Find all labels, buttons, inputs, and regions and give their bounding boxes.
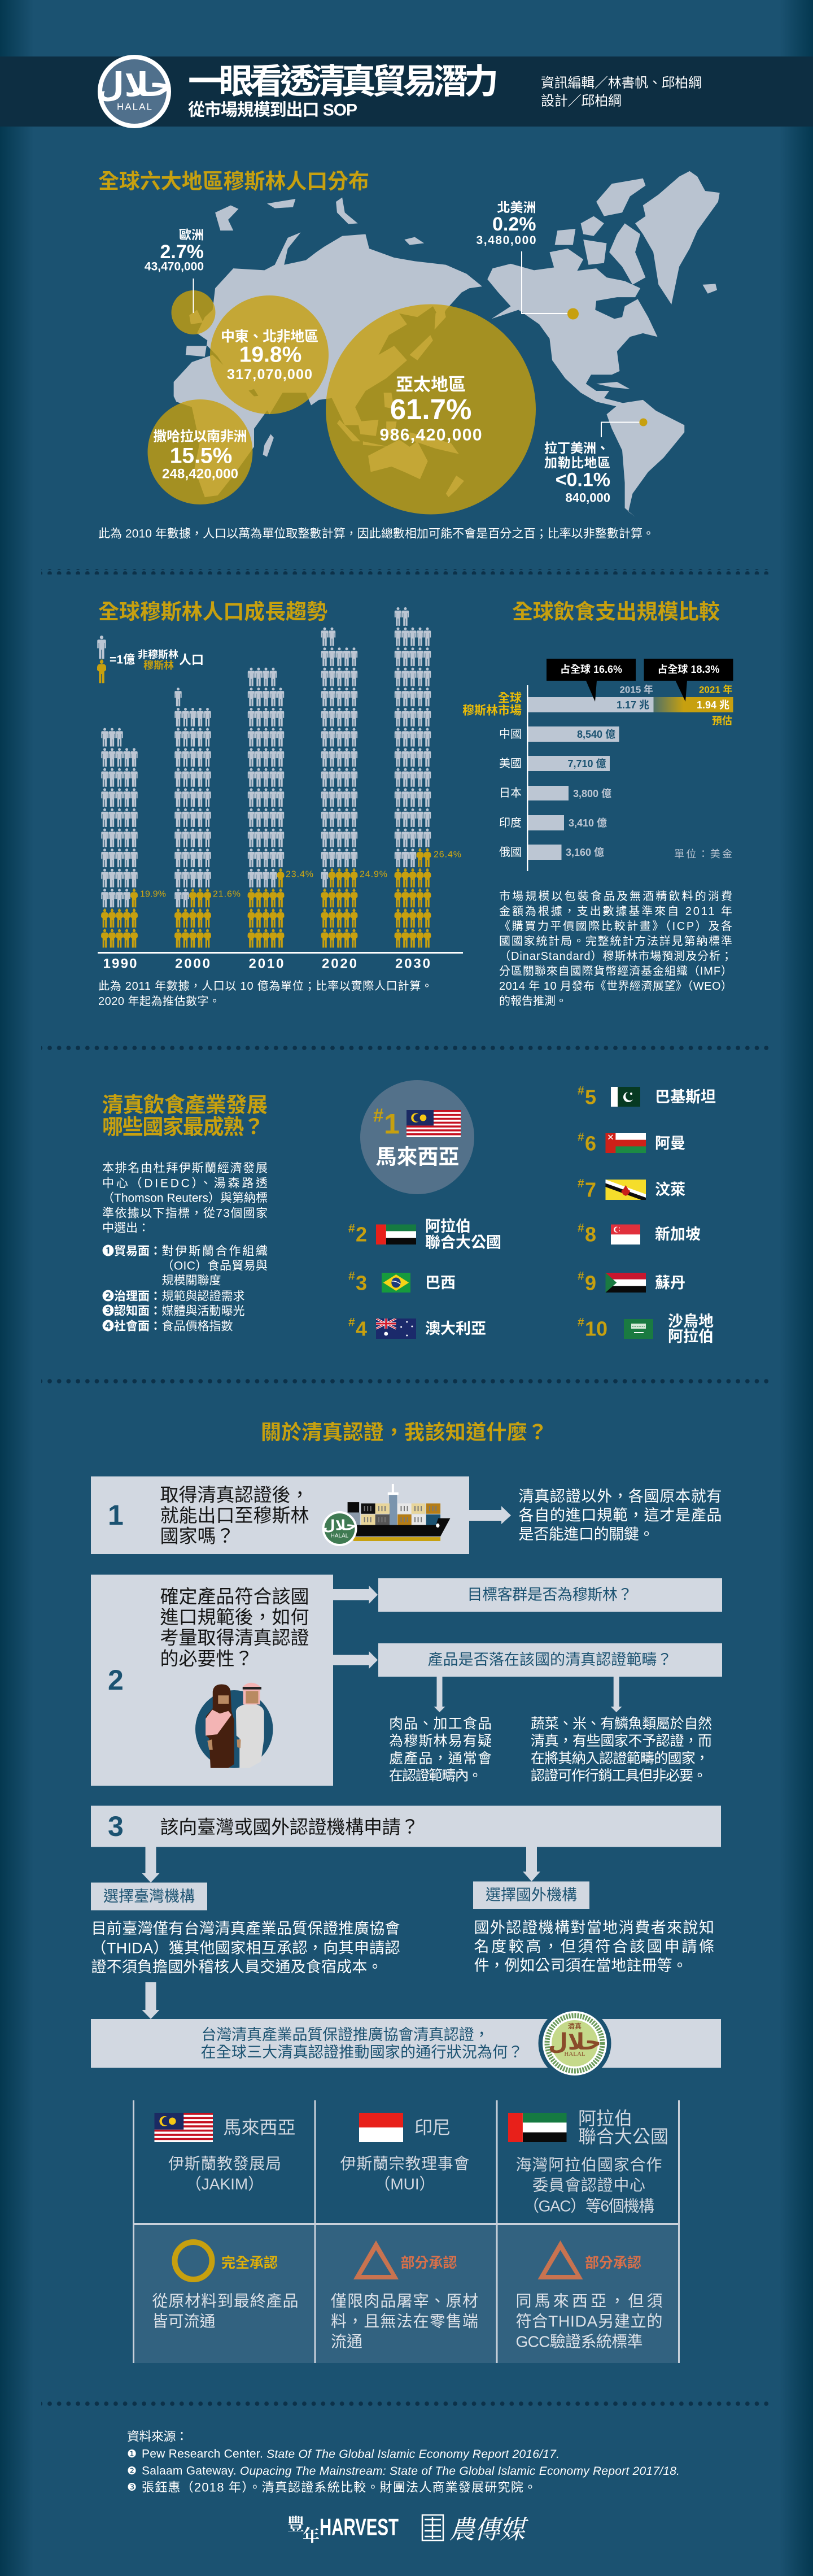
cell: UAE: （GAC）等6個機構 (523, 2198, 654, 2214)
rank 2 UAE: # (348, 1222, 355, 1235)
text: overseas option (474, 1920, 714, 1974)
cell: Malaysia: 伊斯蘭教發展局 (168, 2155, 281, 2173)
panel: world muslim population map (98, 169, 720, 540)
label: Sub-Saharan Africa: 撒哈拉以南非洲 (154, 428, 247, 444)
text: overseas option: 件，例如公司須在當地註冊等。 (474, 1957, 688, 1974)
icon: halal badge: HALAL (117, 102, 152, 112)
question box: target customers: 目標客群是否為穆斯林？ (467, 1586, 632, 1603)
rank 5 Pakistan (578, 1085, 716, 1108)
icon: THIDA halal seal (539, 2007, 611, 2080)
label: Middle East: 19.8% (239, 342, 301, 367)
bar chart: 日本 (499, 786, 522, 799)
text: overseas option: 名度較高，但須符合該國申請條 (474, 1938, 714, 1955)
logo: Harvest (287, 2510, 399, 2547)
legend: 穆斯林 (143, 659, 174, 671)
rank 8 Singapore (578, 1221, 701, 1246)
rank 2 UAE: 2 (356, 1222, 367, 1246)
ranking description: 中選出： (102, 1221, 150, 1235)
logo: Harvest: HARVEST (320, 2514, 399, 2540)
bar chart: 印度 (499, 816, 522, 829)
rank 3 Brazil: 3 (356, 1271, 367, 1295)
cell: Indonesia: 印尼 (414, 2117, 451, 2138)
sources: ❸ (127, 2481, 137, 2494)
callout: 2021 share: 占全球 18.3% (657, 664, 720, 675)
subtitle: 從市場規模到出口 SOP (188, 101, 357, 120)
text: naturally halal foods: 認證可作行銷工具但非必要。 (531, 1768, 707, 1784)
step 1 box: 國家嗎？ (160, 1525, 235, 1547)
arrow: to THIDA question (142, 1982, 159, 2019)
sources: ❷ (127, 2465, 137, 2477)
cell: UAE: 委員會認證中心 (532, 2176, 645, 2194)
logo: Agricultural media: 農傳媒 (449, 2509, 529, 2545)
rank 8 Singapore: # (578, 1221, 584, 1235)
rank 10 Saudi Arabia: 沙烏地 (668, 1313, 714, 1330)
label: Sub-Saharan Africa: 248,420,000 (162, 467, 238, 481)
panel: recognition table (133, 2100, 679, 2363)
bar chart: 單位：美金 (674, 848, 732, 860)
indicator list: ❶貿易面： (102, 1245, 161, 1257)
rank 7 Brunei: # (578, 1177, 584, 1190)
cell: Malaysia (155, 2113, 296, 2193)
option box: overseas: 選擇國外機構 (486, 1887, 577, 1904)
arrow: to certification scope (333, 1651, 378, 1669)
bar chart: 中國 (499, 728, 522, 741)
bubble: Sub-Saharan Africa (148, 399, 253, 504)
callout: 2015 share (547, 659, 636, 702)
map footnote: 此為 2010 年數據，人口以萬為單位取整數計算，因此總數相加可能不會是百分之百；比率以非整數計算。 (98, 528, 654, 540)
cell: UAE: 海灣阿拉伯國家合作 (516, 2156, 662, 2174)
sources (127, 2429, 680, 2495)
callout: 2015 share: 占全球 16.6% (560, 664, 622, 675)
logo: Harvest: 豐 (287, 2510, 304, 2535)
icon: container ship with halal badge: حلال (323, 1517, 356, 1533)
arrow: down to meat products (434, 1677, 445, 1712)
rank 5 Pakistan: 巴基斯坦 (655, 1089, 716, 1106)
cell: partial recognition Indonesia (331, 2240, 478, 2350)
cell: UAE (508, 2108, 668, 2214)
bubble: Middle East and North Africa (210, 295, 329, 414)
option box: overseas (473, 1881, 589, 1909)
header band (0, 55, 813, 128)
question box: certification scope: 產品是否落在該國的清真認證範疇？ (428, 1651, 672, 1668)
rank 4 Australia: 澳大利亞 (425, 1320, 486, 1337)
bubble: Asia Pacific (326, 304, 536, 514)
bar chart: 全球 (498, 691, 522, 705)
bar chart: 俄國 (499, 846, 522, 859)
rank 3 Brazil: 巴西 (425, 1274, 456, 1291)
label: Latin America (544, 418, 647, 505)
step 2 box: 確定產品符合該國 (160, 1586, 309, 1607)
indicator list (102, 1245, 268, 1333)
cell: partial recognition Indonesia: 部分承認 (401, 2255, 457, 2271)
text: Taiwan option: 目前臺灣僅有台灣清真產業品質保證推廣協會 (91, 1920, 400, 1937)
rank 6 Oman (578, 1131, 685, 1155)
cell: full recognition: 完全承認 (221, 2255, 278, 2271)
indicator list: 對伊斯蘭合作組織 (161, 1245, 268, 1257)
text: naturally halal foods: 蔬菜、米、有鱗魚類屬於自然 (531, 1716, 712, 1732)
year axis labels: 1990 (103, 956, 137, 972)
cell: full recognition: 皆可流通 (152, 2313, 216, 2330)
cell: Malaysia: （JAKIM） (186, 2175, 264, 2193)
label: Europe: 43,470,000 (145, 260, 204, 273)
chart note: 2020 年起為推估數字。 (98, 995, 220, 1008)
cell: UAE: 阿拉伯 (578, 2108, 632, 2129)
cell: partial recognition UAE (516, 2240, 663, 2350)
cell: Indonesia: （MUI） (374, 2175, 435, 2193)
heading: 關於清真認證，我該知道什麼？ (261, 1420, 548, 1444)
step 2 box: 2 (108, 1664, 124, 1696)
sources: ❶ (127, 2448, 137, 2460)
rank 7 Brunei (578, 1177, 685, 1202)
cell: full recognition (152, 2242, 298, 2330)
heading: 全球六大地區穆斯林人口分布 (98, 169, 369, 193)
credits (541, 76, 702, 108)
credits: 資訊編輯／林書帆、邱柏綱 (541, 76, 702, 90)
rank 2 UAE: 阿拉伯 (425, 1217, 471, 1235)
rank 10 Saudi Arabia: # (578, 1316, 584, 1329)
legend: 人口 (179, 653, 204, 667)
rank 10 Saudi Arabia (578, 1313, 714, 1345)
arrow: down to natural products (611, 1677, 622, 1712)
cell: partial recognition Indonesia: 僅限肉品屠宰、原材 (331, 2292, 478, 2309)
step 1 box: 就能出口至穆斯林 (160, 1505, 309, 1526)
rank 5 Pakistan: 5 (585, 1086, 596, 1108)
percent labels: 19.9% (140, 889, 166, 899)
question box: THIDA recognition: 台灣清真產業品質保證推廣協會清真認證， (201, 2026, 489, 2043)
bar chart: 8,540 億 (577, 729, 615, 740)
methodology note: 國國家統計局。完整統計方法詳見第納標準 (499, 934, 732, 948)
bar chart: 2021 年 (699, 684, 733, 695)
text: meat and processed foods: 為穆斯林易有疑 (389, 1733, 492, 1749)
step 3 box: 該向臺灣或國外認證機構申請？ (160, 1817, 419, 1837)
chart note: 此為 2011 年數據，人口以 10 億為單位；比率以實際人口計算。 (98, 980, 432, 993)
heading (102, 1094, 268, 1139)
indicator list: 規模關聯度 (161, 1274, 221, 1287)
cell: partial recognition UAE: 符合THIDA另建立的 (516, 2313, 663, 2330)
chart note (98, 980, 432, 1008)
methodology note: （DinarStandard）穆斯林市場預測及分析； (499, 950, 732, 963)
panel: muslim population growth pictogram (97, 600, 463, 1008)
rank 6 Oman: # (578, 1131, 584, 1143)
step 3 box (91, 1805, 721, 1847)
icon: halal badge: حلال (96, 66, 173, 104)
rank 10 Saudi Arabia: 10 (585, 1317, 607, 1340)
callout: 2021 share (644, 659, 733, 702)
rank 6 Oman: 6 (585, 1132, 596, 1155)
label: Middle East: 中東、北非地區 (221, 329, 318, 345)
ranking description: 準依據以下指標，從73個國家 (102, 1207, 268, 1220)
bar chart: 穆斯林市場 (462, 704, 522, 717)
step 1 box: 取得清真認證後， (160, 1485, 309, 1505)
percent labels: 21.6% (213, 889, 241, 899)
credits: 設計／邱柏綱 (541, 94, 622, 108)
rank 2 UAE: 聯合大公國 (425, 1234, 501, 1251)
step 1 note: 是否能進口的關鍵。 (518, 1526, 654, 1543)
question box: THIDA recognition: 在全球三大清真認證推動國家的通行狀況為何？ (201, 2044, 523, 2061)
icon: muslim couple (195, 1683, 273, 1768)
bar chart: 1990 (101, 728, 138, 948)
label: North America (477, 200, 579, 320)
label: North America: 0.2% (492, 214, 536, 235)
bar chart: 1.17 兆 (617, 699, 649, 711)
title: 一眼看透清真貿易潛力 (188, 62, 499, 101)
methodology note (499, 890, 732, 1008)
methodology note: 分區關聯來自國際貨幣經濟基金組織（IMF） (499, 965, 732, 977)
label: Latin America: 加勒比地區 (544, 455, 610, 470)
sources: Pew Research Center. State Of The Global Islamic Economy Report 2016/17. (142, 2447, 560, 2461)
rank 9 Sudan: # (578, 1270, 584, 1282)
sources: 資料來源： (127, 2429, 188, 2444)
percent labels: 24.9% (360, 870, 387, 879)
icon: THIDA halal seal: حلال (548, 2029, 601, 2055)
label: Asia Pacific: 986,420,000 (379, 426, 482, 444)
cell: partial recognition Indonesia: 流通 (331, 2333, 362, 2350)
cell: Indonesia: 伊斯蘭宗教理事會 (340, 2155, 470, 2173)
year axis labels: 2030 (395, 956, 430, 972)
option box: Taiwan: 選擇臺灣機構 (103, 1888, 195, 1905)
rank 9 Sudan: 9 (585, 1271, 596, 1295)
icon: THIDA halal seal: HALAL (564, 2051, 585, 2057)
rank 1 Malaysia: # (373, 1105, 383, 1125)
heading: 全球飲食支出規模比較 (512, 600, 720, 624)
heading: 全球穆斯林人口成長趨勢 (98, 600, 327, 624)
indicator list: 食品價格指數 (161, 1320, 233, 1333)
bubble: Europe (172, 290, 216, 334)
step 2 box: 的必要性？ (160, 1648, 253, 1669)
rank 4 Australia: # (348, 1316, 355, 1329)
step 2 box: 考量取得清真認證 (160, 1627, 309, 1648)
rank 9 Sudan: 蘇丹 (655, 1274, 685, 1291)
label: Europe: 2.7% (160, 241, 204, 263)
cell: partial recognition UAE: 同馬來西亞，但須 (516, 2292, 663, 2309)
step 1 note: 清真認證以外，各國原本就有 (518, 1488, 722, 1505)
icon: container ship with halal badge (322, 1484, 450, 1546)
percent labels (140, 850, 461, 899)
bar chart: 7,710 億 (567, 758, 606, 769)
label: Latin America: 拉丁美洲、 (544, 441, 609, 455)
panel: halal certification flow (91, 1420, 722, 2080)
label: North America: 3,480,000 (477, 234, 536, 247)
text: meat and processed foods: 在認證範疇內。 (389, 1768, 482, 1784)
cell: partial recognition Indonesia: 料，且無法在零售端 (331, 2313, 478, 2330)
label: Sub-Saharan Africa: 15.5% (170, 444, 232, 468)
indicator list: ❹社會面： (102, 1320, 161, 1333)
text: Taiwan option (91, 1920, 400, 1975)
rank 3 Brazil: # (348, 1270, 355, 1282)
icon: THIDA halal seal: 清真 (568, 2022, 582, 2030)
methodology note: 的報告推測。 (499, 994, 567, 1008)
indicator list: 規範與認證需求 (161, 1290, 245, 1303)
step 1 note: 各自的進口規範，這才是產品 (518, 1507, 722, 1524)
rank 2 UAE (348, 1217, 501, 1251)
bar chart: 1.94 兆 (697, 699, 729, 711)
legend: 非穆斯林 (138, 649, 178, 660)
year axis labels: 2000 (175, 956, 210, 972)
rank 10 Saudi Arabia: 阿拉伯 (668, 1328, 714, 1345)
step 2 box: 進口規範後，如何 (160, 1607, 309, 1628)
step 2 box (91, 1575, 333, 1786)
label: Asia Pacific: 亞太地區 (396, 375, 466, 394)
label: Europe: 歐洲 (179, 228, 204, 242)
rank 4 Australia: 4 (356, 1317, 367, 1340)
sources: Salaam Gateway. Oupacing The Mainstream: State of The Global Islamic Economy Report 2017/18. (142, 2464, 680, 2478)
rank 4 Australia (348, 1316, 486, 1340)
step 1 box (91, 1477, 469, 1554)
label: Europe (145, 228, 204, 313)
methodology note: 2014 年 10 月發布《世界經濟展望》（WEO） (499, 980, 732, 993)
cell: UAE: 聯合大公國 (578, 2126, 668, 2147)
arrow: to target customers (333, 1586, 378, 1604)
methodology note: 金額為根據，支出數據基準來自 2011 年 (499, 905, 732, 917)
heading: 哪些國家最成熟？ (102, 1115, 264, 1139)
text: meat and processed foods (389, 1716, 492, 1784)
legend (97, 636, 204, 683)
bar chart: 2020 (321, 628, 357, 948)
world map (174, 171, 720, 517)
cell: partial recognition UAE: GCC驗證系統標準 (516, 2333, 642, 2350)
text: Taiwan option: （THIDA）獲其他國家相互承認，向其申請認 (91, 1940, 400, 1957)
ranking description (102, 1161, 268, 1235)
arrow: to overseas (523, 1847, 540, 1881)
bar chart: 2000 (174, 687, 211, 948)
rank 6 Oman: 阿曼 (655, 1135, 685, 1152)
question box: THIDA recognition (91, 2007, 721, 2080)
legend: =1億 (110, 653, 135, 667)
percent labels: 26.4% (434, 850, 461, 860)
ranking description: （Thomson Reuters）與第納標 (102, 1192, 268, 1204)
label: Asia Pacific (379, 375, 482, 444)
text: Taiwan option: 證不須負擔國外稽核人員交通及食宿成本。 (91, 1959, 383, 1975)
rank 8 Singapore: 8 (585, 1222, 596, 1246)
bar chart: 2010 (248, 668, 284, 948)
sources: 張鈺惠（2018 年）。清真認證系統比較。財團法人商業發展研究院。 (142, 2480, 536, 2495)
panel: most mature halal countries (102, 1080, 716, 1345)
rank 1 Malaysia: 馬來西亞 (376, 1146, 460, 1168)
bar chart: 3,410 億 (569, 817, 607, 829)
label: Sub-Saharan Africa (154, 428, 247, 481)
bar chart: 美國 (499, 757, 522, 770)
text: naturally halal foods: 清真，有些國家不予認證，而 (531, 1733, 712, 1749)
text: meat and processed foods: 處產品，通常會 (389, 1751, 492, 1766)
label: Middle East (221, 329, 318, 382)
option box: Taiwan (91, 1882, 207, 1911)
text: naturally halal foods: 在將其納入認證範疇的國家， (531, 1751, 709, 1766)
rank 8 Singapore: 新加坡 (655, 1226, 701, 1243)
heading: 清真飲食產業發展 (102, 1094, 268, 1116)
year axis labels: 2020 (322, 956, 357, 972)
text: naturally halal foods (531, 1716, 712, 1784)
rank 3 Brazil (348, 1270, 456, 1295)
bar chart: 預估 (712, 715, 732, 726)
question box: target customers (378, 1578, 722, 1612)
cell: full recognition: 從原材料到最終產品 (152, 2292, 298, 2309)
panel: global food spending comparison (462, 600, 733, 1008)
rank 1 Malaysia (360, 1080, 474, 1194)
cell: partial recognition UAE: 部分承認 (585, 2255, 641, 2271)
label: Latin America: <0.1% (556, 469, 610, 490)
bar chart: 2015 年 (619, 684, 653, 695)
arrow: to Taiwan (142, 1847, 159, 1882)
label: Middle East: 317,070,000 (227, 367, 312, 382)
bar chart (462, 684, 733, 871)
question box: certification scope (378, 1643, 722, 1677)
cell: Indonesia (340, 2113, 470, 2193)
indicator list: ❸認知面： (102, 1305, 161, 1317)
logo: Harvest: 年 (303, 2522, 320, 2547)
bar chart: 2030 (395, 607, 431, 948)
label: Latin America: 840,000 (565, 490, 610, 505)
cell: Malaysia: 馬來西亞 (224, 2117, 296, 2138)
ranking description: 本排名由杜拜伊斯蘭經濟發展 (102, 1161, 268, 1175)
year axis labels (103, 956, 430, 972)
indicator list: （OIC）食品貿易與 (161, 1260, 268, 1272)
rank 7 Brunei: 汶萊 (655, 1181, 685, 1198)
indicator list: 媒體與活動曝光 (161, 1305, 245, 1317)
methodology note: 《購買力平價國際比較計畫》（ICP）及各 (499, 920, 732, 933)
bar chart: 3,800 億 (573, 788, 611, 799)
step 3 box: 3 (108, 1811, 124, 1842)
rank 1 Malaysia: 1 (384, 1108, 400, 1140)
label: Asia Pacific: 61.7% (390, 393, 471, 425)
methodology note: 市場規模以包裝食品及無酒精飲料的消費 (499, 890, 732, 903)
icon: halal badge (96, 55, 173, 128)
step 1 box: 1 (108, 1499, 124, 1531)
text: meat and processed foods: 肉品、加工食品 (389, 1716, 492, 1732)
rank 5 Pakistan: # (578, 1085, 584, 1097)
icon: container ship with halal badge: HALAL (331, 1533, 349, 1539)
year axis labels: 2010 (248, 956, 283, 972)
label: North America: 北美洲 (497, 200, 536, 215)
bar chart: 3,160 億 (566, 847, 604, 858)
percent labels: 23.4% (286, 870, 313, 879)
indicator list: ❷治理面： (102, 1290, 161, 1303)
step 1 note (518, 1488, 722, 1543)
text: overseas option: 國外認證機構對當地消費者來說知 (474, 1920, 714, 1937)
ranking description: 中心（DIEDC）、湯森路透 (102, 1177, 268, 1190)
rank 7 Brunei: 7 (585, 1178, 596, 1201)
rank 9 Sudan (578, 1270, 685, 1295)
arrow: step 1 to note (469, 1506, 511, 1524)
